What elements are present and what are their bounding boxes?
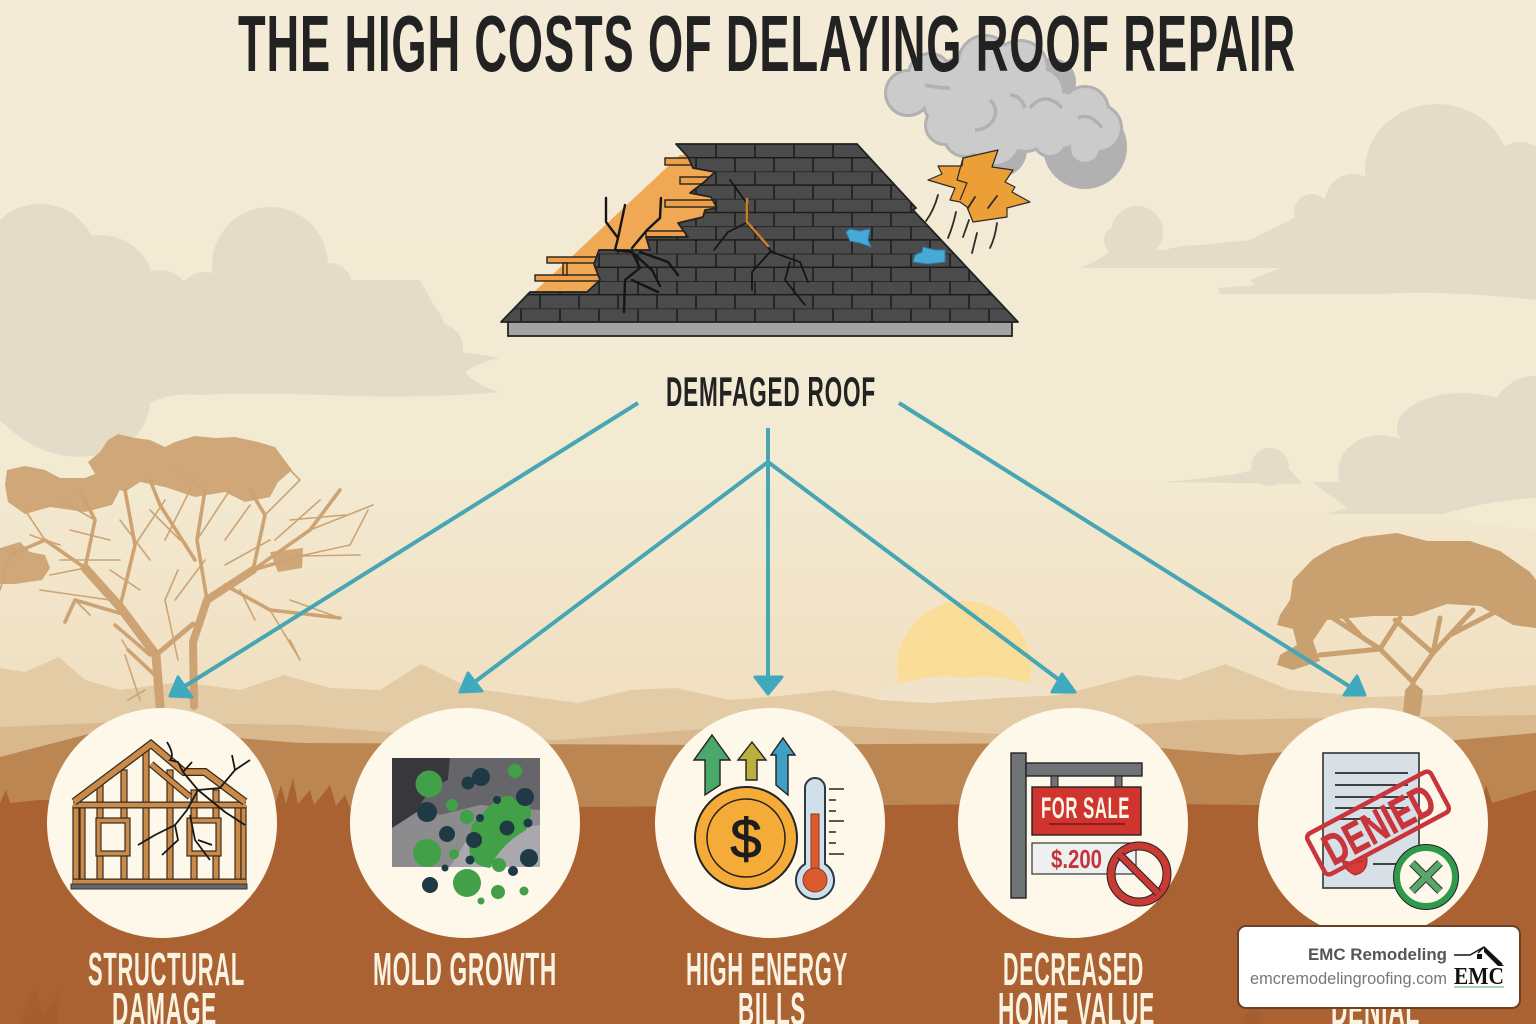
- panel: insurance denial: [1258, 708, 1488, 1024]
- panel: structural damage: STRUCTURAL: [88, 943, 245, 995]
- label: DECREASED: [1003, 943, 1144, 995]
- icon: up arrows: [694, 735, 795, 795]
- roof: fascia: [508, 322, 1012, 336]
- icon circle: [350, 708, 580, 938]
- roof: shingles: [501, 144, 1018, 322]
- label: [686, 943, 848, 1024]
- left tree: [0, 434, 373, 706]
- ground layers with grass: [0, 715, 1536, 1024]
- sun: [897, 601, 1031, 735]
- flying shingle fragments and rain: [926, 150, 1030, 253]
- roof: water leaks: [846, 229, 871, 247]
- right upper cloud: [1365, 104, 1509, 236]
- roof: broken planks: [535, 158, 716, 281]
- icon: dollar coin: $: [730, 807, 762, 870]
- icon: for sale sign: [1011, 753, 1167, 902]
- panel: decreased home value: [958, 708, 1188, 1024]
- arrow: to mold growth: [460, 462, 768, 692]
- icon circle: [655, 708, 885, 938]
- icon: cracked house frame: [71, 742, 250, 889]
- icon: thermometer: [796, 778, 844, 899]
- arrow: to structural damage: [170, 403, 638, 697]
- panel: structural damage: [47, 708, 277, 1024]
- icon: denied document: DENIED: [1315, 775, 1444, 875]
- smoke cloud: [887, 37, 1127, 189]
- arrow: to decreased home value: [768, 462, 1075, 692]
- icon: denied document: [1305, 753, 1455, 906]
- roof: exposed wood underlayment: [534, 155, 722, 292]
- label: [88, 943, 245, 1024]
- badge: company name: EMC Remodeling: [1308, 945, 1447, 964]
- background: sky and clouds: [0, 0, 1536, 760]
- icon: for sale sign: FOR SALE: [1041, 792, 1130, 825]
- icon: dollar coin: [695, 787, 797, 889]
- roof: [501, 144, 1018, 336]
- panel: high energy bills: [655, 708, 885, 1024]
- panel: high energy bills: HIGH ENERGY: [686, 943, 848, 995]
- arrow: to insurance denial: [899, 403, 1365, 695]
- center label: DEMFAGED ROOF: [666, 368, 876, 415]
- panel: mold growth: [350, 708, 580, 995]
- label: [998, 943, 1155, 1024]
- right lower cloud: [1251, 448, 1289, 486]
- arrows: [170, 403, 1365, 697]
- icon: for sale sign: $.200: [1051, 844, 1102, 874]
- badge: logo mark: EMC: [1454, 964, 1504, 990]
- badge: logo mark: [1454, 947, 1504, 990]
- icon: mold patch: [392, 758, 540, 904]
- logo badge: [1238, 926, 1520, 1008]
- panel: mold growth: MOLD GROWTH: [373, 943, 557, 995]
- right acacia tree: [1277, 533, 1536, 716]
- badge: website: emcremodelingroofing.com: [1250, 970, 1447, 988]
- icon circle: [958, 708, 1188, 938]
- roof: cracks: [606, 180, 808, 312]
- arrow: to energy bills: [755, 428, 782, 694]
- background hills: [0, 657, 1536, 780]
- icon circle: [47, 708, 277, 938]
- icon circle: [1258, 708, 1488, 938]
